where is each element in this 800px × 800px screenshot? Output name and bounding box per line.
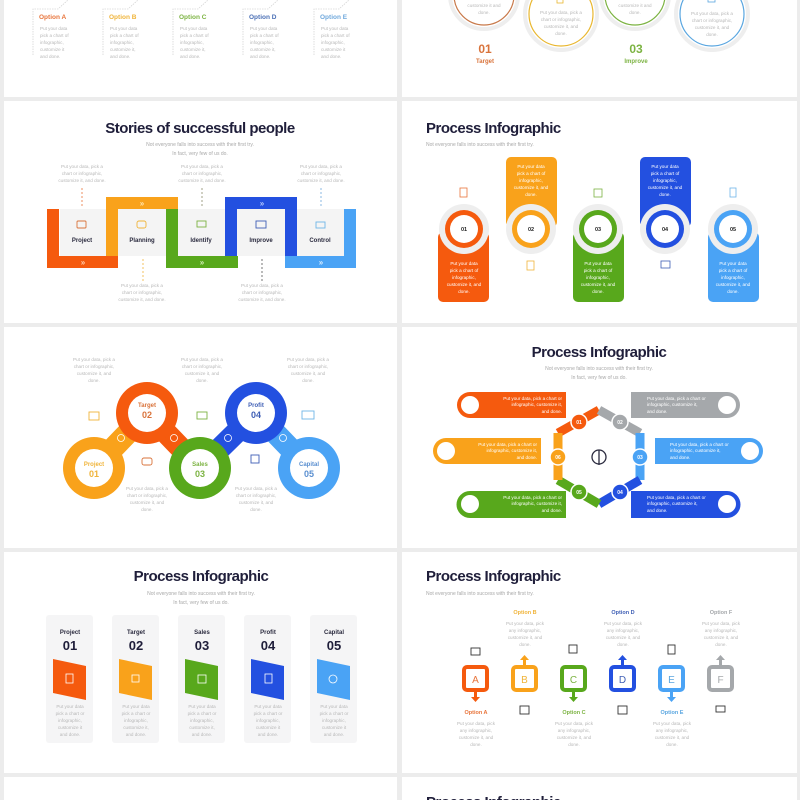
card 05: infographic, [322,718,346,723]
pill 04: 04 [662,227,669,233]
option C: customize it, [180,47,206,52]
slide: bottom-right partial [402,777,797,800]
captions: Put your data, pick a [181,357,223,362]
pill 02 [506,157,557,270]
option labels: Option F [710,610,733,616]
slide: hexagon process: 01 [576,420,582,426]
option captions: any infographic, [656,728,688,733]
captions: Put your data, pick a [73,357,115,362]
captions: done. [302,378,314,383]
option captions: customize it, and [606,635,641,640]
card 03: infographic, [190,718,214,723]
pill 04: pick a chart of [651,171,680,176]
card 05: pick a chart or [320,711,349,716]
option captions: Put your data, pick [457,721,496,726]
option E: customize it [321,47,346,52]
option C: infographic, [180,40,204,45]
captions: chart or infographic, [182,364,222,369]
option captions: any infographic, [705,628,737,633]
option C [173,0,209,59]
card 01: customize it [58,725,83,730]
label 03 improve [624,42,648,65]
box B [513,655,536,690]
option captions: any infographic, [607,628,639,633]
icons [89,411,314,465]
dashed connectors and captions: Put your data, pick a [181,164,223,169]
pill 03: infographic, [586,275,610,280]
captions: customize it, and [291,371,326,376]
slide: circles top-right [402,0,797,97]
box D [611,655,634,690]
slide: linked circles [4,327,397,548]
captions: Put your data, pick a [235,486,277,491]
option E [314,0,350,59]
card 04: customize it [256,725,281,730]
card 01: Put your data [56,704,84,709]
captions: customize it, and [77,371,112,376]
card 04: pick a chart or [254,711,283,716]
slide: hexagon process: 02 [617,420,623,426]
card 02: Target [127,630,145,636]
slide: cards process [4,552,397,773]
dashed connectors and captions: Put your data, pick a [241,283,283,288]
card 05 [310,615,357,743]
option captions: customize it, and [508,635,543,640]
option captions: Put your data, pick [604,621,643,626]
pill 03: customize it, and [581,282,616,287]
pill 05: pick a chart of [719,268,748,273]
option B: pick a chart of [110,33,139,38]
option C: Option C [179,14,207,21]
pill 05: done. [727,289,739,294]
left pills [433,392,566,518]
subtitle: Not everyone falls into success with their first try. [146,142,254,148]
node project 01: Project [84,462,104,468]
option B: and done. [110,54,130,59]
option A: pick a chart of [40,33,69,38]
title: Process Infographic [426,120,561,137]
pill 05: 05 [730,227,736,233]
option labels: Option E [661,710,684,716]
right pills: Put your data, pick a chart or [647,396,706,401]
box E [660,667,683,702]
connectors [94,413,309,468]
option B: infographic, [110,40,134,45]
circle 4: Put your data, pick a [691,11,733,16]
captions: chart or infographic, [288,364,328,369]
option A [33,0,69,59]
right pills: Put your data, pick a chart or [670,442,729,447]
option E: and done. [321,54,341,59]
option captions: done. [617,642,629,647]
chain chart [47,197,356,268]
left pills: and done. [517,455,537,460]
dashed connectors and captions: chart or infographic, [122,290,162,295]
card 02: infographic, [124,718,148,723]
pill 03: pick a chart of [584,268,613,273]
pill 04: customize it, and [648,185,683,190]
pill 05: Put your data [719,261,747,266]
option A: Put your data [40,26,68,31]
option C: and done. [180,54,200,59]
slide: bottom-left partial [4,777,397,800]
option B: Put your data [110,26,138,31]
left pills: Put your data, pick a chart or [503,396,562,401]
card 03: and done. [192,732,212,737]
node sales 03 [169,437,231,499]
card 03: Sales [194,630,210,636]
option labels: Option A [464,710,488,716]
option captions: done. [519,642,531,647]
option A: customize it [40,47,65,52]
slide: options A-F process [402,552,797,773]
slide: process infographic pills [402,101,797,323]
option D: infographic, [250,40,274,45]
label 03 improve: 03 [629,42,643,56]
card 03: Put your data [188,704,216,709]
captions: Put your data, pick a [126,486,168,491]
circle 3 [601,0,669,29]
node sales 03: 03 [195,469,205,479]
label 01 target [476,42,494,65]
card 04: Profit [260,630,276,636]
circle 3: customize it and [618,3,652,8]
left pills: infographic, customize it, [511,402,562,407]
slide: hexagon process: 03 [637,455,643,461]
subtitle: Not everyone falls into success with their first try. [545,366,653,372]
option D: customize it, [250,47,276,52]
circle 2: chart or infographic, [541,17,581,22]
card 01: and done. [60,732,80,737]
card 02: customize it, [123,725,149,730]
pill 01: infographic, [452,275,476,280]
circle 4: chart or infographic, [692,18,732,23]
card 02 [112,615,159,743]
card 04: infographic, [256,718,280,723]
option captions: done. [666,742,678,747]
box A [464,667,487,702]
subtitle: Not everyone falls into success with their first try. [426,591,534,597]
option E: Put your data [321,26,349,31]
card 05: Put your data [320,704,348,709]
option D: Option D [249,14,277,21]
card 01: infographic, [58,718,82,723]
box F [709,655,732,690]
step labels: Project [72,238,92,244]
option E: pick a chart of [321,33,350,38]
option D [243,0,279,59]
option labels: Option C [562,710,586,716]
circle 1: done. [478,10,490,15]
card 02: 02 [129,638,143,653]
dashed connectors and captions: customize it, and done. [118,297,166,302]
node profit 04: 04 [251,410,261,420]
captions: chart or infographic, [236,493,276,498]
circle 4 [676,0,748,50]
icons [471,645,725,714]
pill 05 [708,188,759,302]
dashed connectors and captions [58,164,345,302]
right pills: and done. [647,508,667,513]
dashed connectors and captions: chart or infographic, [301,171,341,176]
pill 02: done. [525,192,537,197]
card 01: Project [60,630,80,636]
card 05: Capital [324,630,344,636]
pill 04 [640,157,691,268]
circle 2: Put your data, pick a [540,10,582,15]
pill 01 [438,188,489,302]
box D: D [619,675,626,686]
option captions: customize it, and [704,635,739,640]
node capital 05 [278,437,340,499]
option captions: done. [715,642,727,647]
pill 01: Put your data [450,261,478,266]
right pills: infographic, customize it, [647,402,698,407]
option D: and done. [250,54,270,59]
card 03 [178,615,225,743]
subtitle: In fact, very few of us do. [571,375,627,381]
captions: done. [88,378,100,383]
label 01 target: Target [476,59,494,65]
pill 04: Put your data [651,164,679,169]
option A: Option A [39,14,67,21]
pill 03: done. [592,289,604,294]
node project 01: 01 [89,469,99,479]
node target 02: Target [138,403,156,409]
pill 02: infographic, [519,178,543,183]
dashed connectors and captions: customize it, and done. [178,178,226,183]
chain chart: » [319,258,324,267]
circle 4: done. [706,32,718,37]
dashed connectors and captions: Put your data, pick a [121,283,163,288]
option captions: done. [470,742,482,747]
option A: and done. [40,54,60,59]
node profit 04: Profit [248,403,264,409]
chain chart: » [260,199,265,208]
slide: hexagon process [402,327,797,548]
card 04 [244,615,291,743]
subtitle: In fact, very few of us do. [172,151,228,157]
left pills: Put your data, pick a chart or [478,442,537,447]
box C: C [570,675,577,686]
pill 01: customize it, and [447,282,482,287]
option D: Put your data [250,26,278,31]
option captions: any infographic, [509,628,541,633]
pill 02: Put your data [517,164,545,169]
dashed connectors and captions: customize it, and done. [238,297,286,302]
option captions: Put your data, pick [506,621,545,626]
title: Process Infographic [134,568,269,585]
card 03: 03 [195,638,209,653]
label 01 target: 01 [478,42,492,56]
right pills [631,392,763,518]
pill 05: customize it, and [716,282,751,287]
option captions: Put your data, pick [702,621,741,626]
option captions: Put your data, pick [653,721,692,726]
captions: Put your data, pick a [287,357,329,362]
card 05: customize it [322,725,347,730]
dashed connectors and captions: Put your data, pick a [300,164,342,169]
captions: done. [250,507,262,512]
captions: customize it, and [130,500,165,505]
pill 02: customize it, and [514,185,549,190]
slide: hexagon process: 04 [617,490,623,496]
pill 02: 02 [528,227,534,233]
node project 01 [63,437,125,499]
pill 01: done. [458,289,470,294]
icon: brain [592,450,606,465]
option C: Put your data [180,26,208,31]
pill 05: infographic, [721,275,745,280]
option captions: any infographic, [460,728,492,733]
pill 03: Put your data [584,261,612,266]
card 03: customize it, [189,725,215,730]
title: Process Infographic [532,344,667,361]
pill 04: infographic, [653,178,677,183]
dashed connectors and captions: Put your data, pick a [61,164,103,169]
node capital 05: 05 [304,469,314,479]
title: Process Infographic [426,568,561,585]
left pills: and done. [542,508,562,513]
right pills: and done. [647,409,667,414]
captions: customize it, and [239,500,274,505]
pill 01: pick a chart of [450,268,479,273]
card 01: pick a chart or [56,711,85,716]
step labels: Control [309,238,331,244]
captions: chart or infographic, [74,364,114,369]
box E: E [668,675,675,686]
subtitle: Not everyone falls into success with their first try. [426,142,534,148]
card 04: 04 [261,638,276,653]
dashed connectors and captions: customize it, and done. [58,178,106,183]
card 03: pick a chart or [188,711,217,716]
option B [103,0,139,59]
left pills: Put your data, pick a chart or [503,495,562,500]
card 01 [46,615,93,743]
pill 03: 03 [595,227,601,233]
box F: F [717,675,724,686]
option captions: any infographic, [558,728,590,733]
node sales 03: Sales [192,462,208,468]
option captions [457,621,741,747]
option captions: customize it, and [459,735,494,740]
circle 2: done. [555,31,567,36]
left pills: and done. [542,409,562,414]
pill 03 [573,189,624,302]
label 03 improve: Improve [624,59,648,65]
dashed connectors and captions: customize it, and done. [297,178,345,183]
option B: Option B [109,14,137,21]
step labels: Improve [249,238,273,244]
option C: pick a chart of [180,33,209,38]
circle 3: done. [629,10,641,15]
left pills: infographic, customize it, [511,501,562,506]
dashed connectors and captions: chart or infographic, [182,171,222,176]
option labels: Option B [513,610,537,616]
right pills: and done. [670,455,690,460]
pill 01: 01 [461,227,467,233]
right pills: infographic, customize it, [670,448,721,453]
dashed connectors and captions: chart or infographic, [242,290,282,295]
circle 2 [525,0,597,50]
card 04: and done. [258,732,278,737]
chain chart: » [200,258,205,267]
card 04: Put your data [254,704,282,709]
left pills: infographic, customize it, [486,448,537,453]
slide: stories of successful people [4,101,397,323]
chain chart: » [140,199,145,208]
circle 1 [450,0,518,29]
step labels [72,221,331,244]
node capital 05: Capital [299,462,319,468]
option E: Option E [320,14,348,21]
circle 2: customize it, and [544,24,579,29]
box C [562,667,585,702]
option captions: Put your data, pick [555,721,594,726]
step labels: Planning [129,238,155,244]
option E: infographic, [321,40,345,45]
captions: customize it, and [185,371,220,376]
card 02: Put your data [122,704,150,709]
card 02: and done. [126,732,146,737]
slide: options top-left [4,0,397,97]
hexagon [558,410,640,504]
card 05: and done. [324,732,344,737]
captions [73,357,329,512]
option captions: customize it, and [557,735,592,740]
circle 1: customize it and [467,3,501,8]
card 05: 05 [327,638,341,653]
subtitle: Not everyone falls into success with their first try. [147,591,255,597]
joint markers [118,434,286,442]
card 01: 01 [63,638,77,653]
box A: A [472,675,479,686]
option D: pick a chart of [250,33,279,38]
right pills: infographic, customize it, [647,501,698,506]
node target 02: 02 [142,410,152,420]
title: Stories of successful people [105,120,295,137]
node profit 04 [225,382,287,444]
subtitle: In fact, very few of us do. [173,600,229,606]
option A: infographic, [40,40,64,45]
dashed connectors and captions: chart or infographic, [62,171,102,176]
chain chart: » [81,258,86,267]
right pills: Put your data, pick a chart or [647,495,706,500]
pill 04: done. [659,192,671,197]
option B: customize it, [110,47,136,52]
option labels [464,610,733,716]
box B: B [521,675,528,686]
option labels: Option D [611,610,635,616]
step labels: Identify [190,238,212,244]
node target 02 [116,382,178,444]
captions: done. [141,507,153,512]
slide: hexagon process: 05 [576,490,582,496]
circle 4: customize it, and [695,25,730,30]
option captions: customize it, and [655,735,690,740]
pill 02: pick a chart of [517,171,546,176]
slide: hexagon process: 06 [555,455,561,461]
hexagon numbers [550,414,648,500]
captions: done. [196,378,208,383]
captions: chart or infographic, [127,493,167,498]
option captions: done. [568,742,580,747]
card 02: pick a chart or [122,711,151,716]
